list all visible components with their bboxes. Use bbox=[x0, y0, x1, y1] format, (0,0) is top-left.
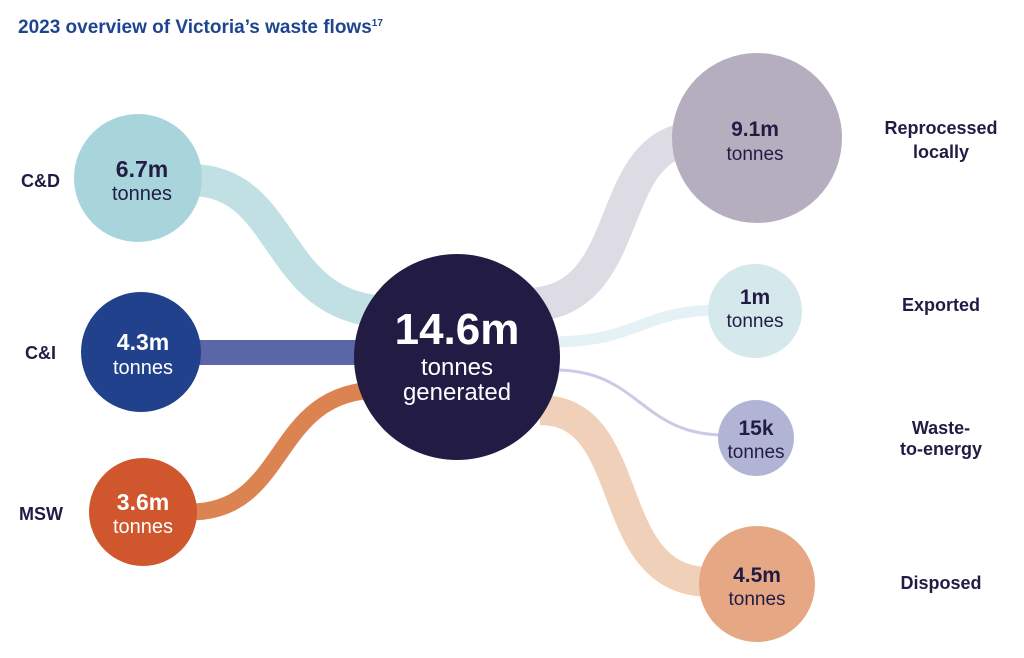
circle: C&D bbox=[74, 114, 202, 242]
circle: disposed: 4.5m bbox=[733, 564, 781, 587]
right labels bbox=[884, 118, 998, 593]
circle: exported bbox=[708, 264, 802, 358]
circle: total bbox=[354, 254, 560, 460]
left labels: C&D bbox=[21, 171, 60, 191]
circle: MSW bbox=[89, 458, 197, 566]
circle: disposed bbox=[699, 526, 815, 642]
right labels: Waste- bbox=[912, 418, 970, 438]
circle: disposed: tonnes bbox=[728, 589, 786, 610]
flow: exported bbox=[550, 310, 720, 342]
title: 17 bbox=[372, 18, 383, 29]
flow: waste-to-energy bbox=[555, 370, 725, 435]
circle: MSW: 3.6m bbox=[117, 489, 169, 515]
circle: C&I bbox=[81, 292, 201, 412]
circle: C&I: 4.3m bbox=[117, 329, 169, 355]
flow: C&D bbox=[190, 180, 390, 312]
circle: reprocessed: 9.1m bbox=[731, 118, 779, 141]
circle: reprocessed: tonnes bbox=[726, 144, 784, 165]
circle: total: generated bbox=[403, 379, 511, 406]
flow: MSW bbox=[190, 390, 380, 512]
circle: total: tonnes bbox=[421, 354, 493, 381]
right labels: Disposed bbox=[900, 573, 982, 593]
right labels: Exported bbox=[902, 295, 980, 315]
flow: disposed bbox=[540, 410, 710, 582]
left labels bbox=[19, 171, 63, 524]
flow: C&I bbox=[195, 340, 365, 365]
circle: reprocessed bbox=[672, 53, 842, 223]
circle: exported: tonnes bbox=[726, 311, 784, 332]
title: 2023 overview of Victoria’s waste flows bbox=[18, 17, 372, 38]
circle: C&D: 6.7m bbox=[116, 156, 168, 182]
right labels: to-energy bbox=[900, 439, 982, 459]
circle: C&I: tonnes bbox=[113, 357, 173, 379]
flow: reprocessed bbox=[530, 138, 700, 305]
right labels: locally bbox=[913, 142, 969, 162]
circle: MSW: tonnes bbox=[113, 516, 173, 538]
left labels: MSW bbox=[19, 504, 63, 524]
circle: total: 14.6m bbox=[395, 305, 519, 354]
circle: waste-to-energy bbox=[718, 400, 794, 476]
circle: C&D: tonnes bbox=[112, 183, 172, 205]
circle: exported: 1m bbox=[740, 286, 770, 309]
left labels: C&I bbox=[25, 343, 56, 363]
circle: waste-to-energy: tonnes bbox=[727, 442, 785, 463]
circle: waste-to-energy: 15k bbox=[738, 417, 774, 440]
right labels: Reprocessed bbox=[884, 118, 998, 138]
